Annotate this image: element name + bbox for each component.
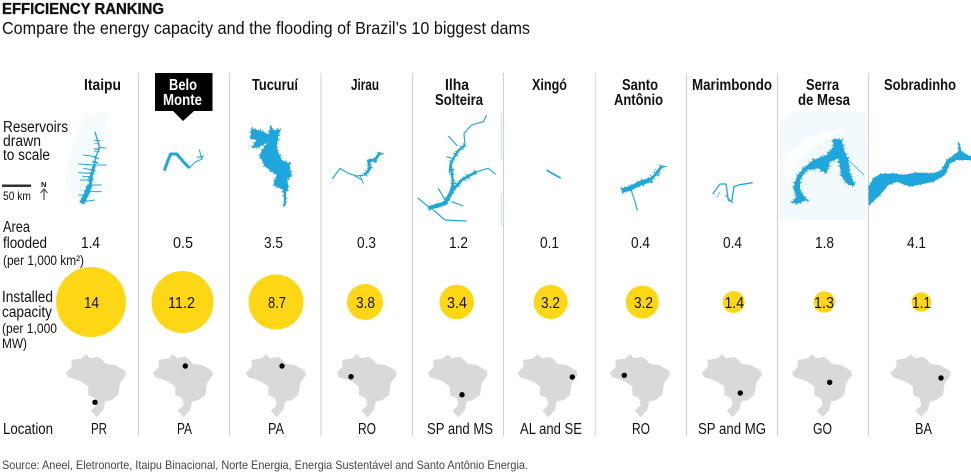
capacity circles: 8.7 — [268, 295, 286, 312]
location values: PA — [268, 421, 285, 438]
area flooded values: 0.4 — [631, 235, 650, 252]
location values: RO — [358, 421, 376, 438]
row label: location: Location — [3, 421, 53, 438]
area flooded values: 1.4 — [81, 235, 100, 252]
reservoir: Itaipu — [65, 112, 108, 207]
row label: installed capacity: MW) — [2, 336, 27, 351]
row label: area flooded: (per 1,000 km²) — [3, 253, 84, 268]
reservoir: Jirau — [332, 153, 384, 184]
location values: PR — [91, 421, 107, 438]
reservoir: Santo Antonio — [622, 166, 667, 211]
area flooded values: 0.4 — [723, 235, 742, 252]
area flooded values: 0.3 — [357, 235, 376, 252]
row label: area flooded: flooded — [3, 235, 47, 252]
dam names: Solteira — [435, 92, 483, 109]
dam names: Itaipu — [84, 77, 121, 94]
capacity circles: 3.2 — [541, 295, 560, 312]
reservoir: Ilha Solteira — [418, 113, 502, 227]
location values: SP and MS — [427, 421, 493, 438]
area flooded values — [81, 235, 926, 252]
row label: installed capacity — [2, 289, 57, 351]
reservoir: Tucurui — [250, 125, 292, 205]
capacity circles: 14 — [84, 295, 99, 312]
row label: installed capacity: Installed — [2, 289, 53, 306]
location values: PA — [177, 421, 193, 438]
source note: Source: Aneel, Eletronorte, Itaipu Binacional, Norte Energia, Energia Sustentável and Santo Antônio Energia. — [2, 458, 528, 472]
capacity circles: 3.8 — [356, 295, 375, 312]
row label: area flooded — [3, 219, 84, 268]
row label: reservoirs: drawn — [3, 133, 41, 150]
dam names: Serra — [806, 77, 839, 94]
Belo Monte highlighted label: Monte — [163, 92, 202, 109]
capacity circles: 1.3 — [814, 295, 834, 312]
row label: area flooded: Area — [3, 219, 30, 236]
scale bar: N — [41, 180, 46, 189]
dam names: Ilha — [445, 77, 469, 94]
dam names: de Mesa — [798, 92, 850, 109]
scale bar — [2, 180, 48, 203]
dam names — [84, 73, 956, 121]
dam names: Sobradinho — [884, 77, 956, 94]
row label: reservoirs: to scale — [3, 147, 50, 164]
row label: installed capacity: (per 1,000 — [2, 321, 57, 336]
location maps — [66, 354, 951, 417]
reservoir: Xingo — [547, 170, 561, 178]
location values: GO — [813, 421, 832, 438]
area flooded values: 0.5 — [173, 235, 193, 252]
dam names: Marimbondo — [692, 77, 772, 94]
dam names: Antônio — [614, 92, 663, 109]
capacity circles: 11.2 — [168, 295, 195, 312]
row label: installed capacity: capacity — [2, 304, 52, 321]
area flooded values: 1.2 — [449, 235, 468, 252]
title: EFFICIENCY RANKING — [2, 1, 164, 18]
dam names: Tucuruí — [252, 77, 298, 94]
capacity circles: 1.1 — [912, 295, 931, 312]
dam names: Xingó — [532, 77, 567, 94]
location values: SP and MG — [698, 421, 766, 438]
area flooded values: 4.1 — [907, 235, 926, 252]
row label: reservoirs — [3, 119, 68, 164]
area flooded values: 3.5 — [264, 235, 283, 252]
capacity circles: 1.4 — [724, 295, 744, 312]
reservoir: Sobradinho — [869, 140, 971, 204]
scale bar: 50 km — [3, 189, 31, 203]
dam names: Jirau — [351, 77, 379, 94]
location values — [91, 421, 933, 438]
row label: reservoirs: Reservoirs — [3, 119, 68, 136]
reservoir: Belo Monte — [164, 149, 203, 171]
dam names: Santo — [622, 77, 658, 94]
Belo Monte highlighted label: Belo — [169, 77, 197, 94]
capacity circles: 3.4 — [447, 295, 467, 312]
area flooded values: 1.8 — [815, 235, 834, 252]
location values: AL and SE — [520, 421, 582, 438]
Belo Monte highlighted label — [155, 73, 212, 121]
capacity circles: 3.2 — [634, 295, 653, 312]
location values: BA — [915, 421, 933, 438]
location values: RO — [632, 421, 650, 438]
reservoir: Serra da Mesa — [780, 112, 866, 220]
area flooded values: 0.1 — [540, 235, 559, 252]
capacity circles — [56, 267, 931, 337]
subtitle: Compare the energy capacity and the flooding of Brazil’s 10 biggest dams — [2, 18, 530, 38]
reservoir: Marimbondo — [713, 183, 753, 203]
